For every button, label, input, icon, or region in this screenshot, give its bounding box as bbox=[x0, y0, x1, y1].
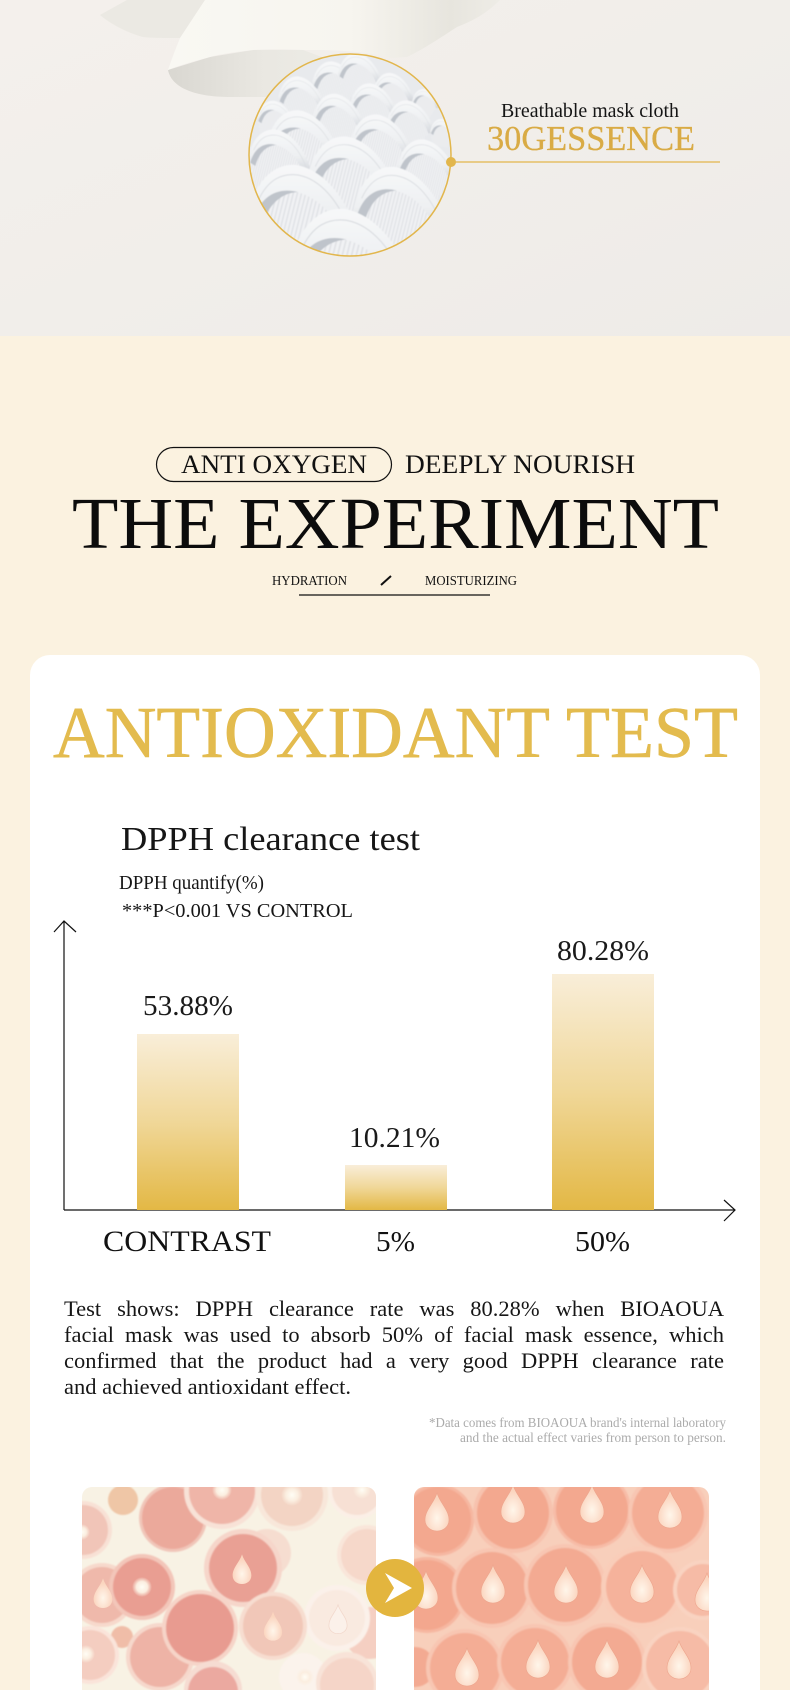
panel: antioxidant test card bbox=[30, 655, 760, 1690]
bar: 50% 80.28% bbox=[552, 936, 654, 1210]
text block: test results: facial mask was used to absorb 50% of facial mask essence, which bbox=[64, 1322, 724, 1347]
hero panel: mask cloth bbox=[0, 0, 790, 338]
chart note: significance: ***P<0.001 VS CONTROL bbox=[122, 900, 353, 922]
subheading: deeply nourish: DEEPLY NOURISH bbox=[405, 450, 635, 479]
callout value: 30GESSENCE: 30GESSENCE bbox=[487, 119, 695, 158]
tag pill: anti oxygen bbox=[156, 448, 392, 482]
chart title: DPPH clearance test: DPPH clearance test bbox=[121, 821, 421, 858]
text block: test results: and achieved antioxidant effect. bbox=[64, 1374, 351, 1399]
droplets bbox=[414, 1485, 719, 1686]
bar: contrast 53.88%: 53.88% bbox=[143, 991, 233, 1022]
callout line and dot bbox=[446, 157, 720, 167]
chart axes bbox=[54, 921, 735, 1221]
footnote: data source: and the actual effect varies from person to person. bbox=[460, 1430, 726, 1445]
footnote: data source bbox=[429, 1415, 726, 1445]
tag pill: anti oxygen: ANTI OXYGEN bbox=[181, 450, 367, 479]
text block: test results bbox=[64, 1296, 724, 1399]
callout label: breathable mask cloth: Breathable mask cloth bbox=[501, 100, 679, 122]
bar: 5% 10.21% bbox=[345, 1123, 447, 1210]
axis label: 5%: 5% bbox=[376, 1227, 415, 1258]
text block: test results: confirmed that the product had a very good DPPH clearance rate bbox=[64, 1348, 724, 1373]
bar chart bbox=[54, 921, 735, 1258]
card title: antioxidant test: ANTIOXIDANT bbox=[53, 692, 550, 773]
tagline: hydration and moisturizing bbox=[272, 573, 517, 595]
chart note: DPPH quantify: DPPH quantify(%) bbox=[119, 872, 264, 894]
footnote: data source: *Data comes from BIOAOUA brand's internal laboratory bbox=[429, 1415, 726, 1430]
mask sheet folded fabric bbox=[100, 0, 500, 97]
bar: 50% 80.28%: 80.28% bbox=[557, 936, 649, 967]
main title: the experiment: THE EXPERIMENT bbox=[72, 483, 719, 564]
tagline: hydration and moisturizing: MOISTURIZING bbox=[425, 573, 517, 588]
image panel: skin cells before bbox=[82, 1487, 376, 1690]
image panel: skin cells after bbox=[414, 1487, 709, 1690]
arrow: before to after bbox=[366, 1559, 424, 1617]
bar: 5% 10.21%: 10.21% bbox=[349, 1123, 440, 1154]
bar: contrast 53.88% bbox=[137, 991, 239, 1210]
card title: antioxidant test: TEST bbox=[566, 692, 738, 773]
droplets and cell nuclei bbox=[74, 1480, 371, 1686]
text block: test results: Test shows: DPPH clearance rate was 80.28% when BIOAOUA bbox=[64, 1296, 724, 1321]
magnified fabric lens bbox=[248, 53, 452, 257]
tagline: hydration and moisturizing: HYDRATION bbox=[272, 573, 347, 588]
axis label: contrast: CONTRAST bbox=[103, 1225, 271, 1258]
axis label: 50%: 50% bbox=[575, 1227, 630, 1258]
